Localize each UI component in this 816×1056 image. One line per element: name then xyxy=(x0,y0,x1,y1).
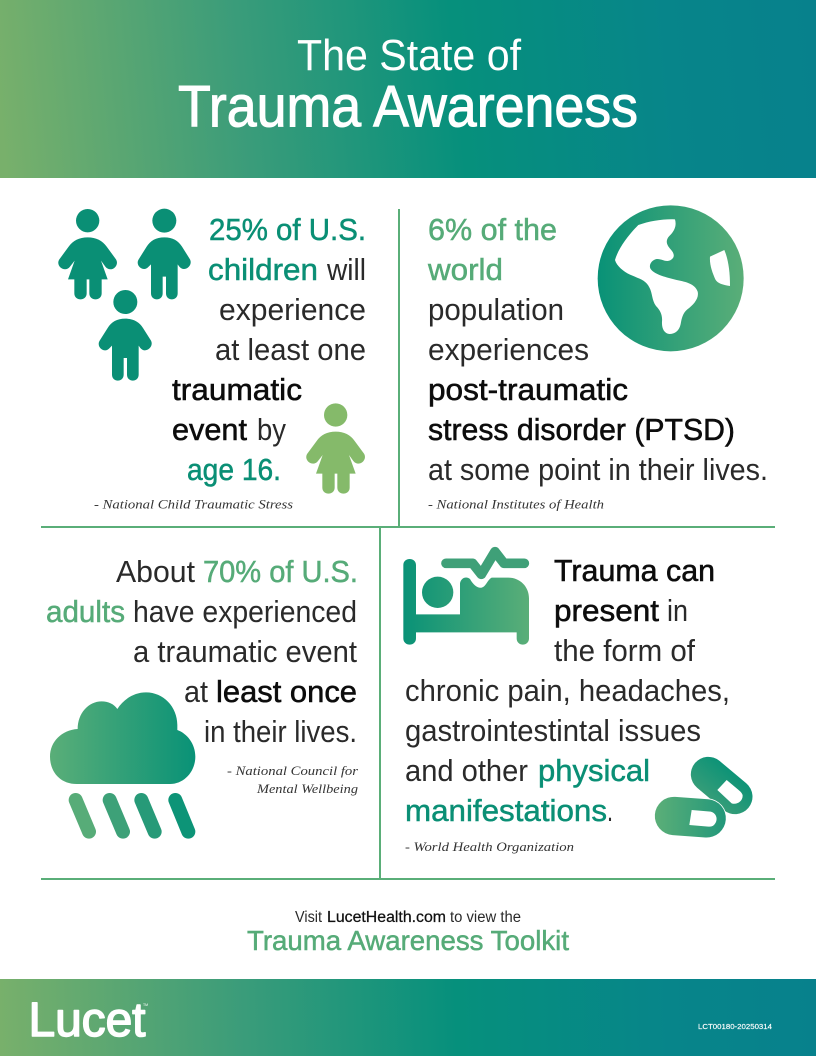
statistic text: post-traumatic xyxy=(428,372,628,407)
statistic text: by xyxy=(257,412,286,447)
icon: three children xyxy=(58,209,191,381)
icon: hospital bed with heartbeat xyxy=(403,552,529,645)
visit line: Visit xyxy=(295,909,323,926)
statistic text: present xyxy=(554,593,659,628)
visit line xyxy=(295,909,521,926)
statistic text xyxy=(46,554,358,749)
statistic text: a traumatic event xyxy=(133,634,357,669)
visit line: to view the xyxy=(450,909,521,926)
statistic text xyxy=(427,212,768,487)
statistic text: gastrointestintal issues xyxy=(405,713,701,748)
trademark: TM xyxy=(143,1003,148,1007)
statistic text: physical xyxy=(538,753,650,788)
statistic text: at least one xyxy=(215,332,366,367)
statistic text: About xyxy=(116,554,195,589)
statistic text xyxy=(172,212,366,487)
statistic text: 70% of U.S. xyxy=(203,554,358,589)
statistic text: . xyxy=(607,793,613,828)
statistic text: event xyxy=(172,412,247,447)
header banner xyxy=(0,0,816,178)
statistic text: will xyxy=(326,252,366,287)
statistic text: adults xyxy=(46,594,125,629)
footer banner xyxy=(0,979,816,1056)
statistic text: manifestations xyxy=(405,793,607,828)
visit line: LucetHealth.com xyxy=(327,909,446,926)
divider lines xyxy=(41,209,775,880)
document code: LCT00180-20250314 xyxy=(698,1022,772,1031)
panel: world PTSD statistic xyxy=(427,205,768,512)
statistic text: at xyxy=(184,674,208,709)
panel: adults statistic xyxy=(46,554,359,832)
icon: highlighted child xyxy=(306,403,365,494)
panel: physical symptoms xyxy=(403,552,743,854)
source citation xyxy=(227,763,359,796)
icon: capsules xyxy=(674,774,743,827)
statistic text: 6% of the xyxy=(428,212,557,247)
source citation: Mental Wellbeing xyxy=(256,781,359,796)
statistic text: traumatic xyxy=(172,372,302,407)
source citation: - National Institutes of Health xyxy=(428,496,604,512)
statistic text: have experienced xyxy=(133,594,357,629)
statistic text: experience xyxy=(219,292,366,327)
statistic text: Trauma can xyxy=(554,553,715,588)
panel: children statistic xyxy=(58,209,366,512)
statistic text: world xyxy=(427,252,503,287)
icon: rain cloud xyxy=(50,692,195,832)
statistic text: children xyxy=(208,252,318,287)
statistic text: experiences xyxy=(428,332,589,367)
statistic text: in xyxy=(667,593,688,628)
statistic text xyxy=(405,553,730,828)
statistic text: and other xyxy=(405,753,528,788)
title line 2: Trauma Awareness xyxy=(178,74,638,140)
statistic text: in their lives. xyxy=(204,714,357,749)
statistic text: the form of xyxy=(554,633,695,668)
toolkit link: Trauma Awareness Toolkit xyxy=(247,925,569,956)
statistic text: population xyxy=(428,292,564,327)
source citation: - National Council for xyxy=(227,763,359,778)
statistic text: age 16. xyxy=(187,452,281,487)
statistic text: at some point in their lives. xyxy=(428,452,768,487)
logo: Lucet: Lucet xyxy=(28,994,146,1047)
title line 1: The State of xyxy=(297,31,522,80)
icon: globe xyxy=(598,205,744,351)
statistic text: stress disorder (PTSD) xyxy=(428,412,735,447)
statistic text: least once xyxy=(216,674,357,709)
statistic text: chronic pain, headaches, xyxy=(405,673,730,708)
statistic text: 25% of U.S. xyxy=(209,212,366,247)
source citation: - World Health Organization xyxy=(405,839,574,854)
source citation: - National Child Traumatic Stress xyxy=(94,496,293,512)
call to action xyxy=(247,909,569,956)
